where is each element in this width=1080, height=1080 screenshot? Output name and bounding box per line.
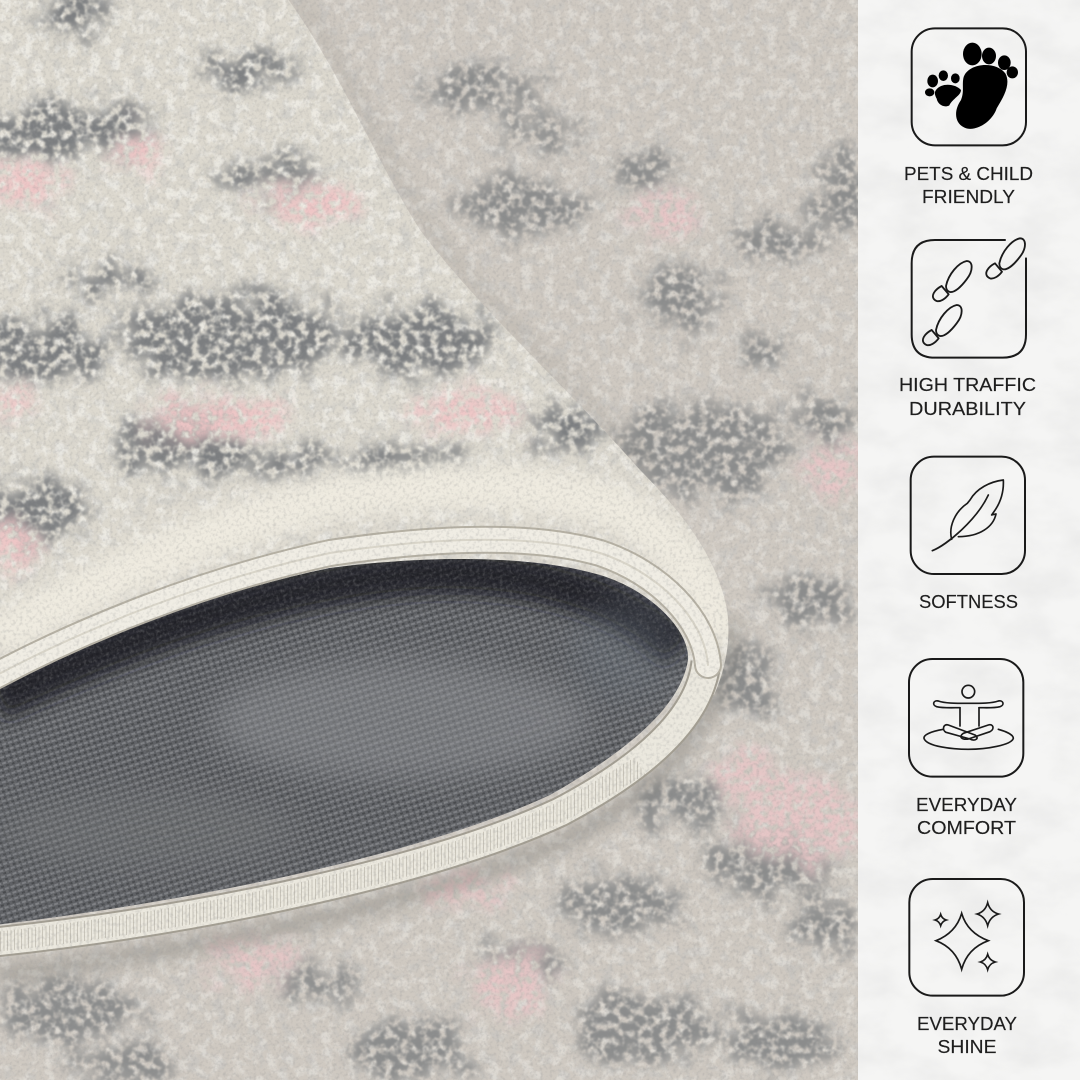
edge shadow beside roll (295, 0, 650, 470)
feature: everyday shine (909, 879, 1024, 1057)
label: everyday shine: EVERYDAY (917, 1014, 1017, 1034)
feature: everyday shine: SHINE (938, 1037, 996, 1057)
icon: feather (911, 457, 1025, 574)
rolled rug top surface (0, 0, 735, 705)
icon: child foot and paw print (912, 28, 1026, 145)
feature: pets and child friendly (904, 28, 1033, 207)
label: high traffic durability: HIGH TRAFFIC (899, 375, 1036, 395)
cream pile lip above binding (0, 487, 722, 640)
shadow cast by roll (0, 620, 732, 975)
icon: sparkles (909, 879, 1024, 996)
feature: softness (911, 457, 1025, 612)
dark rug backing (0, 559, 688, 924)
feature: everyday comfort (909, 659, 1023, 838)
label: everyday comfort: EVERYDAY (916, 795, 1017, 815)
feature: high traffic durability: DURABILITY (909, 399, 1026, 419)
icon: footprints (912, 238, 1026, 358)
binding: lower edge (0, 662, 706, 942)
panel: white feature sidebar (858, 0, 1080, 1080)
feature: high traffic durability (899, 238, 1036, 419)
feature: everyday comfort: COMFORT (917, 818, 1016, 838)
icon: seated meditation figure (909, 659, 1023, 777)
feature: pets and child friendly: FRIENDLY (922, 187, 1015, 207)
binding: upper edge (0, 540, 708, 676)
label: pets and child friendly: PETS & CHILD (904, 164, 1033, 184)
pile grain (0, 0, 858, 1080)
label: softness: SOFTNESS (919, 592, 1018, 612)
